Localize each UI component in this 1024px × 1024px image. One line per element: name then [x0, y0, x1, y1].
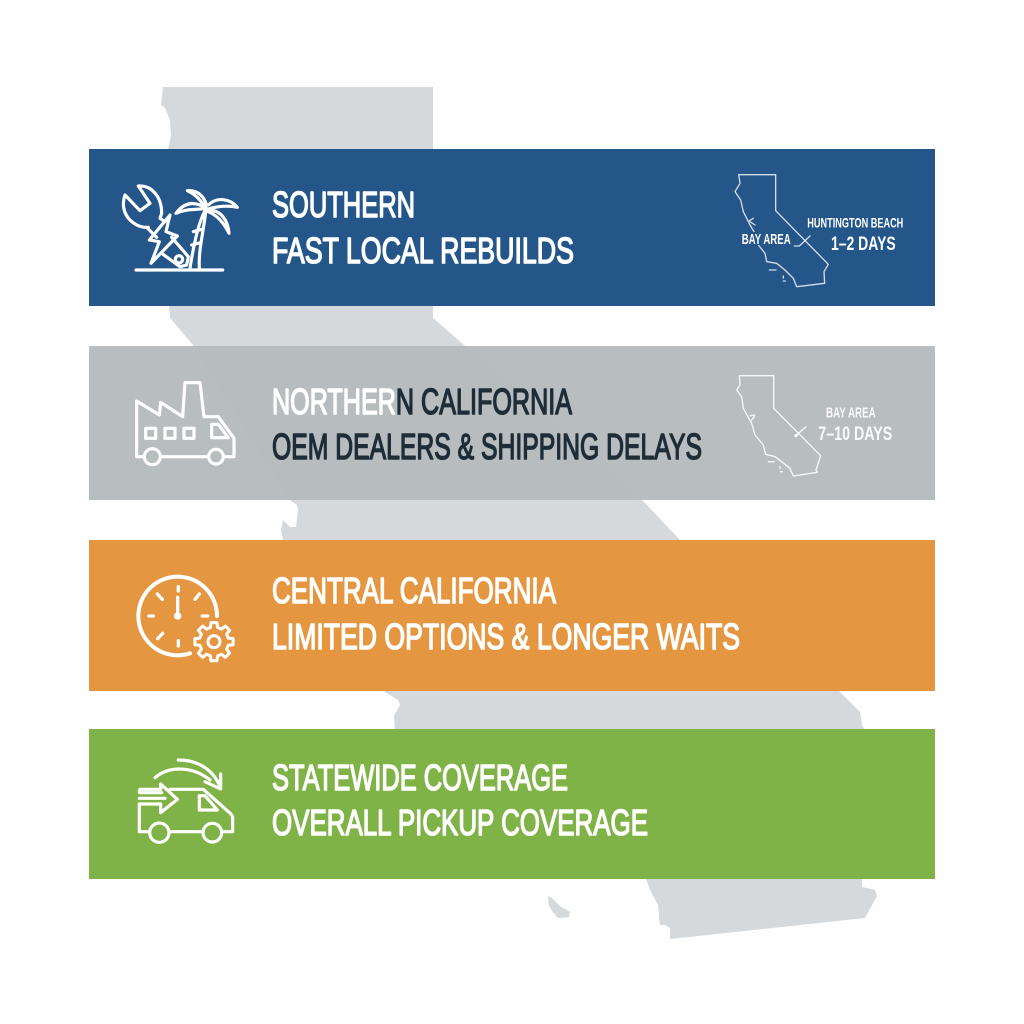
panel: southern: [89, 149, 935, 306]
heading: northern california: [272, 381, 702, 467]
heading: central california: CENTRAL CALIFORNIA: [272, 570, 556, 611]
panel: statewide coverage: [89, 729, 935, 879]
heading: northern california: OEM DEALERS & SHIPPING DELAYS: [272, 426, 702, 467]
heading: southern: SOUTHERN: [272, 184, 415, 225]
heading: northern california: NORTHERN CALIFORNIA: [272, 381, 572, 422]
mini map: southern delivery time: BAY AREA: [742, 232, 791, 248]
heading: central california: [272, 570, 740, 657]
mini map: southern delivery time: [735, 175, 903, 287]
panel: northern california: [89, 346, 935, 500]
heading: statewide coverage: STATEWIDE COVERAGE: [272, 757, 568, 798]
icon: clock and gear: [138, 577, 233, 661]
mini map: southern delivery time: 1–2 DAYS: [831, 234, 896, 255]
background California map silhouette: [161, 87, 877, 939]
heading: statewide coverage: OVERALL PICKUP COVERAGE: [272, 802, 648, 843]
heading: statewide coverage: [272, 757, 648, 843]
mini map: northern delivery time: 7–10 DAYS: [818, 423, 892, 445]
panel: central california: [89, 540, 935, 691]
heading: central california: LIMITED OPTIONS & LONGER WAITS: [272, 616, 740, 657]
mini map: northern delivery time: [737, 376, 892, 476]
heading: southern: FAST LOCAL REBUILDS: [272, 230, 574, 271]
icon: factory truck: [137, 383, 234, 465]
mini map: southern delivery time: HUNTINGTON BEACH: [807, 215, 903, 230]
mini map: northern delivery time: BAY AREA: [826, 406, 876, 422]
icon: pickup van with arrows: [139, 760, 233, 842]
icon: wrench, lightning bolt and palm tree: [123, 186, 237, 270]
heading: southern: [272, 184, 574, 271]
